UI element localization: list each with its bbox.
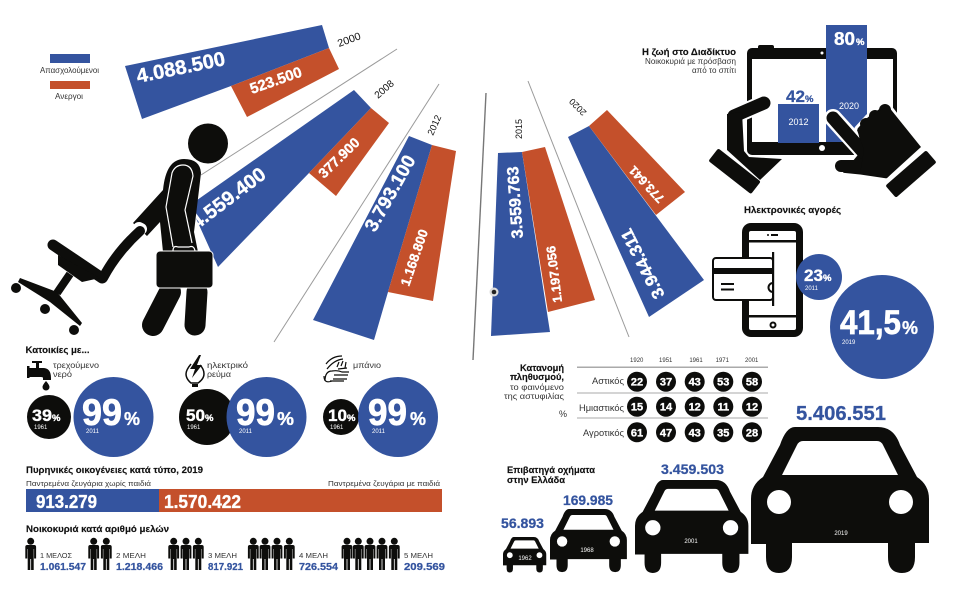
- household: 3 members: 817.921: [208, 561, 243, 573]
- panel: electricity: 1961: [187, 425, 201, 431]
- car: 1962: [501, 516, 546, 572]
- icon: washing hands: [324, 356, 349, 382]
- table: population distribution: 22: [631, 377, 643, 389]
- chart: employed and unemployed 2008: 377.900: [315, 134, 363, 181]
- heading: life on the internet: [642, 47, 736, 75]
- chart: employed and unemployed 2012: 2012: [426, 114, 444, 137]
- panel: running water: 1961: [34, 425, 48, 431]
- table: population distribution: 12: [689, 402, 701, 414]
- household: 5 members: 5 ΜΕΛΗ: [404, 553, 433, 560]
- car: 1968: 169.985: [563, 492, 613, 508]
- heading: population distribution: της αστυφιλίας: [504, 391, 564, 401]
- panel: households by number of members: [25, 524, 445, 573]
- panel: electricity: ρεύμα: [207, 370, 231, 379]
- panel: running water: τρεχούμενο: [53, 361, 100, 370]
- chart: employed and unemployed 2012: [313, 114, 456, 340]
- icon: man pulling office chair: [11, 124, 228, 335]
- table: population distribution: 14: [660, 402, 673, 414]
- panel: electricity: 2011: [239, 429, 253, 435]
- household: 2 members: [88, 538, 163, 573]
- car: 2019: 2019: [834, 531, 848, 537]
- legend: Απασχολούμενοι: [40, 66, 99, 75]
- right hand: [833, 104, 937, 198]
- chart: employed and unemployed 2020: [567, 96, 704, 317]
- stat: online shopping 2019: 41,5: [840, 304, 901, 342]
- chart: employed and unemployed 2012: 1.168.800: [398, 227, 431, 288]
- household: 4 members: 4 ΜΕΛΗ: [299, 553, 328, 560]
- panel: bathroom: 10: [328, 407, 347, 425]
- icon: tablet with hands and bars: 80: [834, 29, 855, 49]
- heading: passenger vehicles: Επιβατηγά οχήματα: [507, 465, 595, 476]
- table: population distribution: 43: [689, 427, 701, 439]
- household: 3 members: [168, 538, 243, 573]
- panel: nuclear families by type: 913.279: [36, 492, 97, 512]
- table: population distribution: [577, 358, 768, 442]
- icon: tablet with hands and bars: 2020: [839, 101, 859, 111]
- chart: employed and unemployed 2000: 4.088.500: [135, 48, 227, 88]
- legend: [40, 54, 99, 101]
- stat: online shopping 2019: %: [902, 318, 918, 338]
- table: population distribution: 1951: [659, 358, 673, 364]
- table: population distribution: Αγροτικός: [583, 428, 625, 438]
- panel: bathroom: 99: [368, 392, 407, 433]
- table: population distribution: 12: [746, 402, 758, 414]
- heading: life on the internet: Η ζωή στο Διαδίκτυο: [642, 47, 736, 58]
- stat: online shopping 2011: 23: [804, 267, 823, 285]
- car: 1962: 56.893: [501, 516, 545, 531]
- fan dividers: [201, 49, 629, 360]
- icon: tablet with hands and bars: %: [856, 37, 865, 48]
- table: population distribution: 2001: [745, 358, 759, 364]
- axis dot: [490, 288, 498, 296]
- household: 1 member: 1 ΜΕΛΟΣ: [40, 553, 73, 560]
- stat: online shopping 2019: 2019: [842, 340, 856, 346]
- household: 1 member: [25, 538, 86, 573]
- table: population distribution: 11: [717, 402, 729, 414]
- heading: population distribution: %: [559, 409, 567, 419]
- car: 2001: 3.459.503: [661, 461, 724, 477]
- car: 1962: 1962: [518, 556, 532, 562]
- panel: running water: 2011: [86, 429, 100, 435]
- legend: Ανεργοι: [55, 92, 83, 101]
- panel: nuclear families by type: Πυρηνικές οικογένειες κατά τύπο, 2019: [26, 465, 203, 476]
- table: population distribution: 1920: [630, 358, 644, 364]
- table: population distribution: 37: [660, 377, 672, 389]
- household: 4 members: [248, 538, 338, 573]
- stat: online shopping 2011: [796, 254, 842, 300]
- heading: population distribution: [504, 363, 567, 419]
- panel: bathroom: %: [410, 409, 426, 429]
- icon: tablet with hands and bars: [708, 25, 937, 198]
- table: population distribution: 58: [746, 377, 758, 389]
- chart: employed and unemployed 2015: 2015: [514, 119, 524, 139]
- household: 1 member: 1.061.547: [40, 561, 86, 573]
- icon: phone with credit card: [713, 223, 803, 337]
- household: 3 members: 3 ΜΕΛΗ: [208, 553, 237, 560]
- chart: employed and unemployed 2000: [125, 25, 363, 119]
- panel: bathroom: μπάνιο: [353, 361, 382, 370]
- table: population distribution: Αστικός: [592, 376, 625, 386]
- panel: electricity: ηλεκτρικό: [207, 361, 249, 370]
- panel: bathroom: 1961: [330, 425, 344, 431]
- panel: running water: νερό: [53, 370, 73, 379]
- chart: employed and unemployed 2012: 3.793.100: [361, 152, 420, 235]
- panel: bathroom: 2011: [372, 429, 386, 435]
- table: population distribution: 43: [689, 377, 701, 389]
- panel: households by number of members: Νοικοκυριά κατά αριθμό μελών: [26, 524, 169, 535]
- chart: employed and unemployed 2015: 1.197.056: [543, 245, 565, 303]
- panel: electricity: [179, 355, 306, 457]
- heading: life on the internet: Νοικοκυριά με πρόσβαση: [645, 57, 736, 66]
- panel: nuclear families by type: Παντρεμένα ζευγάρια με παιδιά: [328, 479, 441, 488]
- car: 2001: 2001: [684, 539, 698, 545]
- heading: online shopping: Ηλεκτρονικές αγορές: [744, 205, 841, 216]
- table: population distribution: 47: [660, 427, 672, 439]
- car: 1968: 1968: [580, 548, 594, 554]
- table: population distribution: 53: [717, 377, 729, 389]
- chart: employed and unemployed 2020: 2020: [567, 96, 588, 118]
- panel: bathroom: %: [347, 413, 356, 424]
- icon: tablet with hands and bars: 2012: [788, 117, 809, 127]
- panel: nuclear families by type: [26, 465, 442, 512]
- heading: population distribution: Κατανομή: [520, 363, 564, 374]
- heading: population distribution: το φαινόμενο: [510, 382, 564, 392]
- table: population distribution: 28: [746, 427, 758, 439]
- heading: life on the internet: από το σπίτι: [692, 66, 736, 75]
- panel: running water: 99: [82, 392, 122, 433]
- household: 2 members: 1.218.466: [116, 561, 163, 573]
- car: 2019: [751, 403, 929, 573]
- panel: running water: 39: [32, 407, 52, 425]
- table: population distribution: 61: [631, 427, 643, 439]
- panel: running water: [27, 361, 154, 457]
- table: population distribution: 1971: [716, 358, 730, 364]
- heading: passenger vehicles: [507, 465, 595, 486]
- chart: employed and unemployed 2020: 773.641: [626, 163, 667, 206]
- icon: tablet with hands and bars: %: [805, 94, 814, 105]
- stat: online shopping 2019: [830, 275, 934, 379]
- chart: employed and unemployed 2020: 3.944.311: [617, 225, 669, 302]
- heading: homes with: Κατοικίες με...: [26, 345, 90, 356]
- car: 1968: [550, 492, 627, 572]
- panel: electricity: %: [277, 409, 294, 429]
- stat: online shopping 2011: 2011: [805, 286, 819, 292]
- chart: employed and unemployed 2000: 523.500: [248, 64, 304, 98]
- stat: online shopping 2011: %: [823, 273, 832, 284]
- household: 5 members: [342, 538, 445, 573]
- heading: population distribution: πληθυσμού,: [510, 372, 564, 383]
- chart: employed and unemployed 2008: [187, 78, 397, 267]
- icon: tap: [27, 361, 51, 391]
- car: 2001: [635, 461, 748, 573]
- chart: employed and unemployed 2000: 2000: [336, 30, 363, 50]
- table: population distribution: 35: [717, 427, 729, 439]
- table: population distribution: 1961: [689, 358, 703, 364]
- household: 2 members: 2 ΜΕΛΗ: [116, 553, 146, 560]
- panel: electricity: %: [205, 413, 214, 424]
- panel: electricity: 50: [186, 407, 205, 425]
- panel: electricity: 99: [236, 392, 275, 433]
- chart: employed and unemployed 2015: [491, 119, 595, 336]
- household: 5 members: 209.569: [404, 561, 445, 573]
- panel: nuclear families by type: 1.570.422: [164, 492, 241, 512]
- table: population distribution: 15: [631, 402, 643, 414]
- panel: bathroom: [323, 356, 438, 457]
- table: population distribution: Ημιαστικός: [579, 403, 625, 413]
- chart: employed and unemployed 2008: 4.559.400: [187, 163, 270, 234]
- heading: passenger vehicles: στην Ελλάδα: [507, 475, 565, 486]
- left hand: [708, 103, 786, 194]
- chart: employed and unemployed 2015: 3.559.763: [504, 166, 527, 239]
- panel: running water: %: [52, 413, 61, 424]
- car: 2019: 5.406.551: [796, 403, 886, 425]
- icon: tablet with hands and bars: 42: [786, 87, 805, 106]
- household: 4 members: 726.554: [299, 561, 338, 573]
- panel: running water: %: [124, 409, 140, 429]
- icon: light bulb with bolt: [186, 355, 204, 387]
- panel: nuclear families by type: Παντρεμένα ζευγάρια χωρίς παιδιά: [26, 479, 152, 488]
- chart: employed and unemployed 2008: 2008: [373, 78, 397, 101]
